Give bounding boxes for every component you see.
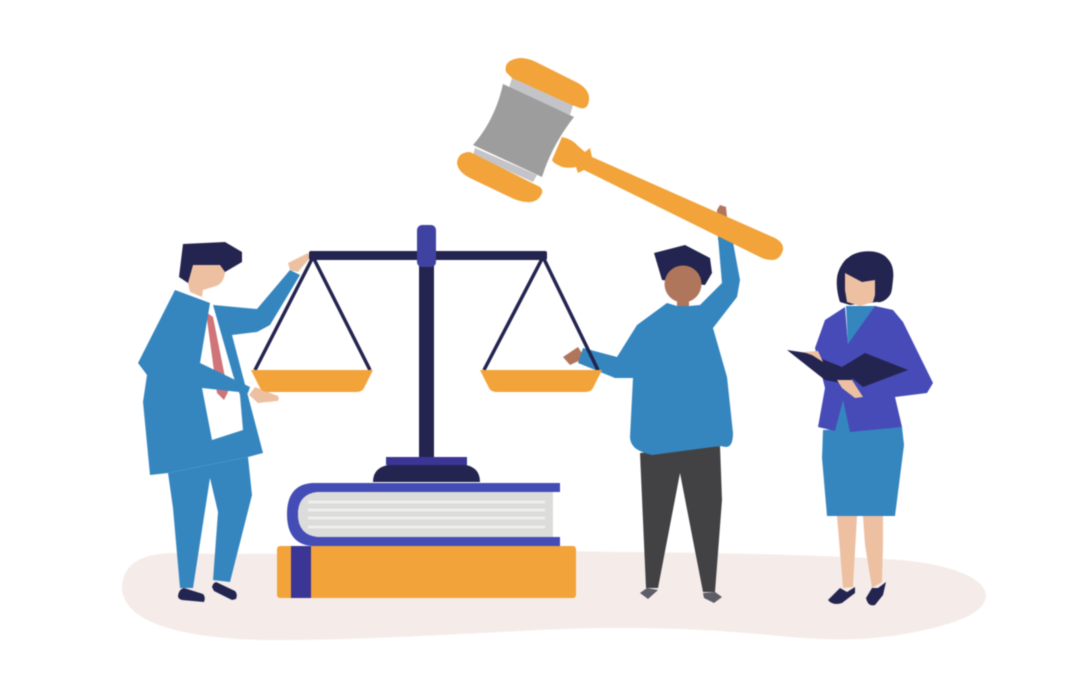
gavel light bands [473,78,573,182]
top hand [288,253,310,272]
tie [206,312,228,400]
right foot [703,592,722,603]
jacket [815,306,933,432]
scale post and beam [309,251,547,260]
shirt [199,303,245,441]
woman with book [787,251,933,605]
hair [837,251,893,305]
hair [179,242,242,283]
left leg [837,516,857,588]
book [787,350,908,387]
ground blob [122,551,986,640]
hair [654,245,712,285]
lower hand [837,380,863,398]
right leg [863,516,883,588]
raised hand [717,205,730,240]
right pan [480,370,602,392]
gavel handle [552,137,783,260]
face [188,262,225,297]
legs [168,457,252,588]
face [845,273,875,306]
bottom book [277,546,576,598]
man in suit [138,242,310,602]
lower hand [249,387,279,403]
balance scale [251,225,602,482]
blouse [834,306,876,433]
skirt [822,427,904,516]
trousers [640,446,722,592]
gavel bottom cap [457,152,542,202]
right shoe [866,582,886,605]
person with gavel [563,205,740,603]
left foot [640,588,658,599]
top book [287,483,560,546]
sweater [578,237,740,455]
upper hand [803,351,823,362]
gavel [457,58,783,260]
jacket [138,270,300,475]
scale strings [255,257,598,370]
books [277,483,576,598]
hand at scale [563,347,585,365]
neck and head [677,295,689,307]
left shoe [828,587,855,604]
gavel top cap [506,58,589,108]
left pan [251,370,373,392]
scale base [386,457,467,465]
shoes [178,588,205,602]
gavel head [473,84,574,177]
